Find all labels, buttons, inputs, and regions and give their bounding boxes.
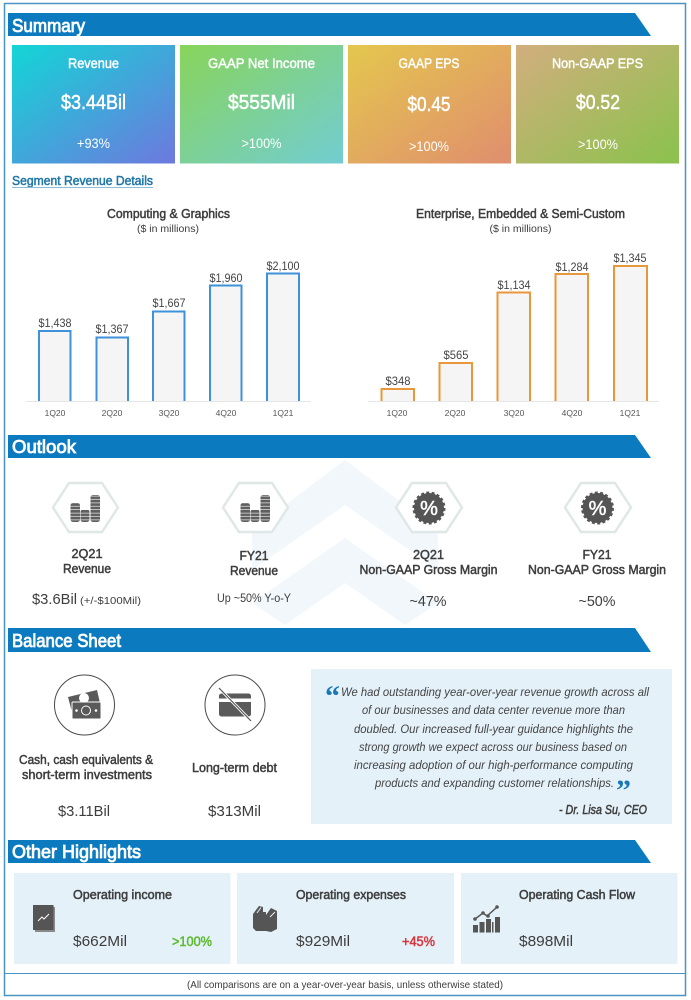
highlight card: operating income: >100% <box>172 934 212 949</box>
quote text: We had outstanding year-over-year revenue growth across all <box>341 685 649 699</box>
icon: bar chart with trend line <box>473 905 500 932</box>
icon: books <box>253 906 277 932</box>
outlook item: 2Q21 non-GAAP gross margin: 2Q21 <box>413 547 444 562</box>
card: revenue: +93% <box>77 136 110 151</box>
axis labels <box>387 408 641 418</box>
card: non-GAAP EPS: >100% <box>578 137 618 152</box>
outlook item: FY21 revenue: FY21 <box>240 548 268 563</box>
bar chart: computing and graphics <box>26 206 311 418</box>
icon: report with trend line <box>33 905 55 932</box>
value labels: $1,667 <box>152 296 186 310</box>
highlight card: operating income <box>14 873 230 964</box>
icon: coins in hexagon <box>223 483 288 532</box>
card: revenue: $3.44Bil <box>61 92 126 114</box>
quote text: doubled. Our increased full-year guidance highlights the <box>354 722 633 736</box>
axis labels <box>45 408 294 418</box>
highlight card: operating expenses <box>237 873 454 964</box>
outlook item: 2Q21 revenue: $3.6Bil <box>32 591 77 608</box>
section: summary <box>8 13 679 164</box>
value labels: $1,345 <box>614 251 647 265</box>
highlight card: operating expenses: $929Mil <box>296 933 350 950</box>
card: GAAP EPS <box>348 45 511 164</box>
card: non-GAAP EPS <box>516 45 679 164</box>
balance item: cash: $3.11Bil <box>58 803 110 820</box>
outlook item: FY21 revenue <box>217 483 291 605</box>
heading: Balance Sheet: Balance Sheet <box>12 631 121 651</box>
balance item: long-term debt: Long-term debt <box>192 760 277 775</box>
axis labels: 4Q20 <box>216 408 237 418</box>
icon: banknotes in circle <box>54 675 114 735</box>
outlook item: 2Q21 revenue: Revenue <box>63 561 111 576</box>
chart title: Computing & Graphics <box>107 206 230 221</box>
outlook item: FY21 revenue: Revenue <box>230 563 278 578</box>
outlook item: 2Q21 non-GAAP gross margin <box>360 483 498 610</box>
card: GAAP net income: >100% <box>242 136 282 151</box>
highlight card: operating expenses: +45% <box>402 934 435 949</box>
icon: opening quotation mark: “ <box>325 680 340 713</box>
heading: Other Highlights <box>8 840 651 863</box>
highlight card: operating income: $662Mil <box>73 933 127 950</box>
outlook item: 2Q21 non-GAAP gross margin: Non-GAAP Gross Margin <box>360 562 498 577</box>
outlook item: 2Q21 revenue: (+/-$100Mil) <box>80 595 141 607</box>
quote text: of our businesses and data center revenue more than <box>362 703 625 717</box>
value labels: $1,438 <box>38 316 72 330</box>
heading: Summary: Summary <box>12 16 85 36</box>
chart title: Enterprise, Embedded & Semi-Custom <box>416 206 625 221</box>
highlight card: operating cash flow <box>461 873 678 964</box>
highlight card: operating income: Operating income <box>73 887 172 902</box>
quote attribution: - Dr. Lisa Su, CEO <box>559 803 647 817</box>
bars <box>39 274 299 401</box>
axis labels: 1Q21 <box>620 408 641 418</box>
highlight card: operating cash flow: $898Mil <box>519 933 573 950</box>
outlook item: 2Q21 revenue: 2Q21 <box>72 546 102 561</box>
balance item: cash <box>19 675 153 820</box>
outlook item: FY21 non-GAAP gross margin <box>528 483 666 610</box>
outlook item: 2Q21 non-GAAP gross margin: ~47% <box>410 593 446 610</box>
heading: Summary <box>8 13 651 36</box>
outlook item: 2Q21 revenue <box>32 483 141 608</box>
axis labels: 3Q20 <box>159 408 180 418</box>
footnote: (All comparisons are on a year-over-year basis, unless otherwise stated) <box>187 979 503 991</box>
card: revenue: Revenue <box>68 56 119 71</box>
quote text: strong growth we expect across our business based on <box>359 740 627 754</box>
chart title <box>107 206 230 235</box>
axis labels: 1Q21 <box>273 408 294 418</box>
icon: crossed-out credit card in circle <box>205 675 265 735</box>
axis labels: 2Q20 <box>102 408 123 418</box>
value labels: $2,100 <box>266 259 300 273</box>
icon: percent badge in hexagon: % <box>420 498 438 520</box>
bars <box>382 266 647 401</box>
outlook item: FY21 non-GAAP gross margin: FY21 <box>582 547 612 562</box>
callout: CEO quote <box>311 669 672 824</box>
chart title: ($ in millions) <box>490 223 552 235</box>
value labels: $1,284 <box>556 260 589 274</box>
axis labels: 1Q20 <box>45 408 66 418</box>
card: revenue <box>12 45 175 164</box>
heading: Balance Sheet <box>8 628 651 652</box>
value labels: $565 <box>444 348 469 362</box>
heading: Outlook <box>8 435 651 458</box>
balance item: cash: short-term investments <box>22 767 152 782</box>
axis labels: 3Q20 <box>504 408 525 418</box>
balance item: cash: Cash, cash equivalents & <box>19 752 153 767</box>
link heading: segment revenue details: Segment Revenue Details <box>12 174 153 188</box>
axis labels: 2Q20 <box>445 408 466 418</box>
balance item: long-term debt: $313Mil <box>208 803 261 820</box>
card: non-GAAP EPS: Non-GAAP EPS <box>552 56 643 71</box>
value labels: $1,134 <box>498 278 531 292</box>
quote text <box>341 685 649 790</box>
card: GAAP net income: GAAP Net Income <box>208 56 315 71</box>
outlook item: FY21 non-GAAP gross margin: ~50% <box>578 593 616 610</box>
card: GAAP EPS: GAAP EPS <box>398 56 460 71</box>
quote text: products and expanding customer relationships. <box>374 776 614 790</box>
heading: Other Highlights: Other Highlights <box>12 842 141 862</box>
value labels <box>38 259 300 336</box>
axis labels: 4Q20 <box>562 408 583 418</box>
value labels <box>386 251 647 388</box>
value labels: $348 <box>386 374 411 388</box>
watermark: up chevrons <box>252 460 438 625</box>
chart title: ($ in millions) <box>137 223 199 235</box>
balance item: long-term debt <box>192 675 277 820</box>
outlook item: FY21 revenue: Up ~50% Y-o-Y <box>217 593 291 605</box>
bar chart: enterprise, embedded and semi-custom <box>368 206 659 418</box>
quote text: increasing adoption of our high-performance computing <box>354 758 633 772</box>
value labels: $1,960 <box>210 271 243 285</box>
card: GAAP EPS: $0.45 <box>408 94 450 116</box>
chart title <box>416 206 625 235</box>
card: GAAP EPS: >100% <box>409 139 449 154</box>
highlight card: operating expenses: Operating expenses <box>296 887 406 902</box>
axis labels: 1Q20 <box>387 408 408 418</box>
card: non-GAAP EPS: $0.52 <box>576 92 620 114</box>
value labels: $1,367 <box>96 322 129 336</box>
highlight card: operating cash flow: Operating Cash Flow <box>519 887 636 902</box>
icon: coins in hexagon <box>53 483 118 532</box>
icon: closing quotation mark: ” <box>616 774 631 807</box>
card: GAAP net income: $555Mil <box>228 92 295 114</box>
outlook item: FY21 non-GAAP gross margin: Non-GAAP Gross Margin <box>528 562 666 577</box>
card: GAAP net income <box>180 45 343 164</box>
icon: percent badge in hexagon: % <box>589 498 607 520</box>
heading: Outlook: Outlook <box>12 437 77 457</box>
